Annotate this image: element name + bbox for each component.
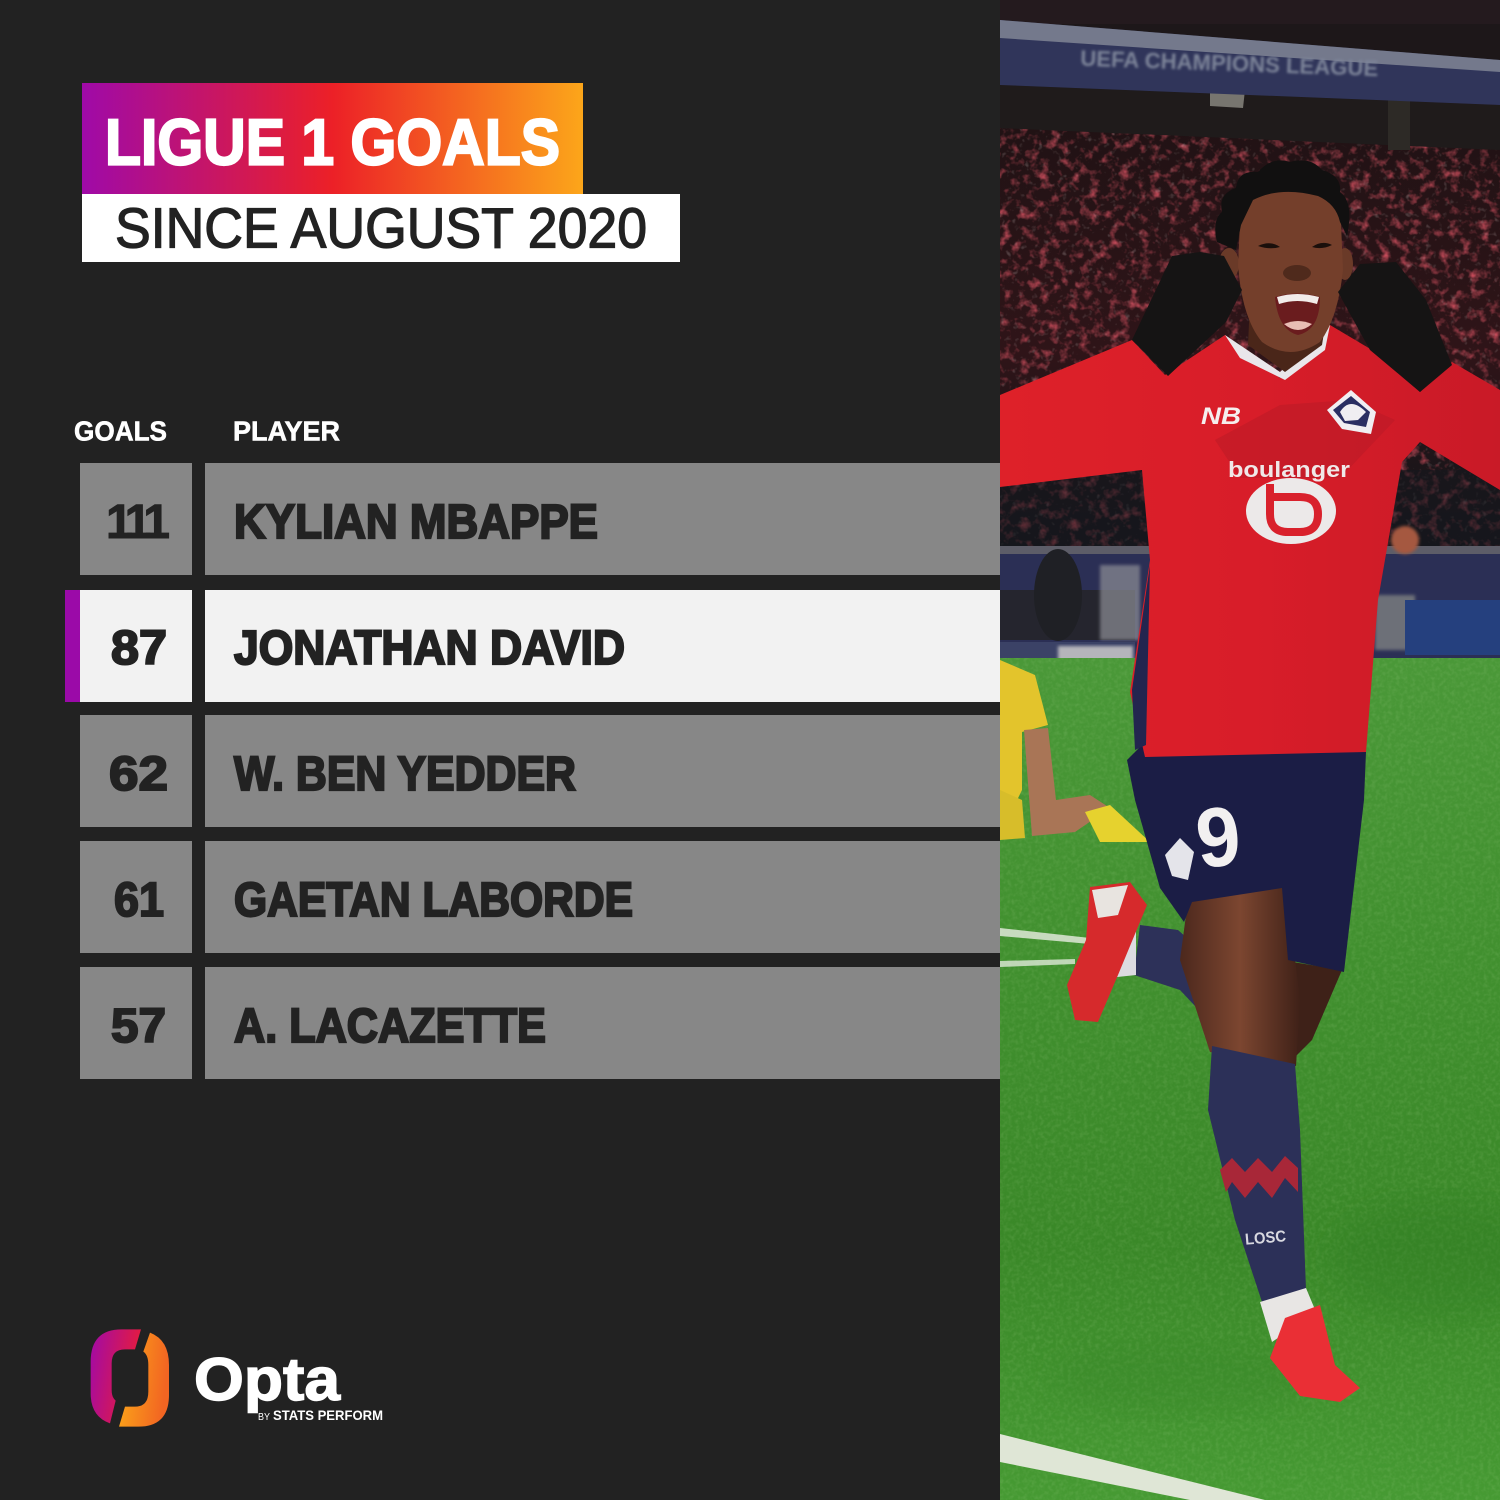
row: Kylian Mbappe, 111: [80, 463, 1000, 575]
back leg: [1067, 882, 1195, 1022]
boot: back foot: [1067, 882, 1147, 1022]
logo: Opta by Stats Perform: [91, 1329, 383, 1427]
sponsor logo: [1246, 478, 1336, 544]
row: W. Ben Yedder, 62: 62: [109, 748, 168, 801]
ears: [1220, 248, 1238, 276]
mouth: [1275, 294, 1320, 335]
pitch: [1000, 658, 1500, 1500]
table: [65, 416, 1000, 1079]
row: Jonathan David, 87 (highlighted): 87: [111, 622, 167, 675]
column heading: goals: GOALS: [74, 416, 167, 446]
row: W. Ben Yedder, 62: [80, 715, 1000, 827]
background player in yellow: [1000, 660, 1150, 842]
nose: [1283, 265, 1311, 281]
torso and arms: [1000, 325, 1500, 757]
row: Kylian Mbappe, 111: KYLIAN MBAPPE: [234, 496, 598, 549]
subtitle: Since August 2020: SINCE AUGUST 2020: [115, 196, 647, 260]
number 9: 9: [1191, 788, 1245, 886]
icon: Opta ring: [91, 1329, 169, 1427]
sock text: LOSC: [1244, 1228, 1287, 1249]
boot: front foot: [1270, 1305, 1360, 1402]
title: Ligue 1 Goals: [82, 83, 583, 194]
row: Jonathan David, 87 (highlighted): [65, 590, 1000, 702]
tagline: BY: [258, 1411, 270, 1423]
shorts crest: [1165, 838, 1194, 880]
logo: New Balance: NB: [1201, 403, 1241, 430]
planted leg: [1180, 885, 1360, 1402]
stadium background: [1000, 0, 1500, 664]
banner: UEFA Champions League: UEFA CHAMPIONS LEAGUE: [1080, 46, 1379, 81]
crest: LOSC: [1327, 390, 1376, 434]
sock: [1208, 1046, 1306, 1302]
row: A. Lacazette, 57: [80, 967, 1000, 1079]
row: W. Ben Yedder, 62: W. BEN YEDDER: [234, 748, 576, 801]
wordmark: Opta: [194, 1346, 341, 1413]
row: A. Lacazette, 57: A. LACAZETTE: [234, 1000, 546, 1053]
eyes: [1258, 243, 1332, 248]
title: Ligue 1 Goals: LIGUE 1 GOALS: [105, 106, 560, 178]
gloves: [1132, 252, 1452, 392]
row: Kylian Mbappe, 111: 111: [106, 496, 170, 549]
row: A. Lacazette, 57: 57: [111, 1000, 166, 1053]
head: [1215, 160, 1353, 372]
column heading: player: PLAYER: [233, 416, 340, 446]
row: Gaetan Laborde, 61: GAETAN LABORDE: [234, 874, 633, 927]
sponsor text: boulanger: [1228, 457, 1350, 482]
shorts: [1127, 742, 1366, 972]
photo: Jonathan David celebrating: [1000, 0, 1500, 1500]
hair: [1215, 160, 1349, 250]
banner: UEFA Champions League: [1000, 20, 1500, 105]
row: Gaetan Laborde, 61: [80, 841, 1000, 953]
row: Jonathan David, 87 (highlighted): JONATHAN DAVID: [234, 622, 625, 675]
tagline: STATS PERFORM: [273, 1407, 383, 1423]
row: Gaetan Laborde, 61: 61: [114, 874, 164, 927]
